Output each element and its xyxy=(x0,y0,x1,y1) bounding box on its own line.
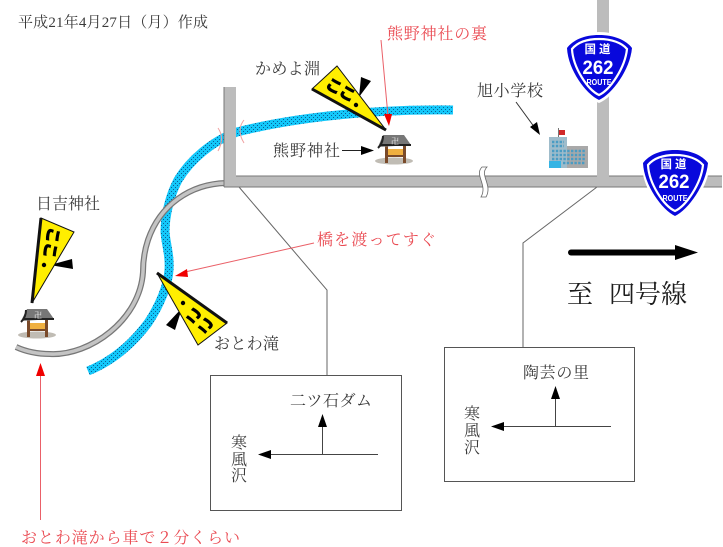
label: 寒風沢: 寒 xyxy=(464,404,480,423)
label: 橋を渡ってすぐ: 橋を渡ってすぐ xyxy=(317,231,436,249)
label: 寒風沢: 寒 xyxy=(231,433,247,452)
label: travel time: おとわ滝から車で２分くらい xyxy=(21,528,240,547)
arrow: left xyxy=(258,450,378,459)
arrow: to school xyxy=(516,102,540,135)
shield: route 262 east: 262 xyxy=(658,172,690,193)
label: 至 四号線: 四号線 xyxy=(609,280,687,309)
panel: left junction box xyxy=(210,376,402,510)
road break mark xyxy=(479,167,488,197)
label: 寒風沢: 沢 xyxy=(464,439,480,457)
arrow: to bridge xyxy=(175,243,314,277)
big arrow: to route 4 xyxy=(571,245,698,260)
label: 熊野神社: 熊野神社 xyxy=(273,142,340,160)
icon: school xyxy=(549,128,588,168)
label: 旭小学校: 旭小学校 xyxy=(477,82,544,100)
shield: route 262 north xyxy=(566,32,634,103)
label: 寒風沢: 沢 xyxy=(231,467,247,485)
label: 陶芸の里: 陶芸の里 xyxy=(523,364,589,382)
bridge marks xyxy=(218,120,244,151)
road: curved road to Hiyoshi shrine xyxy=(16,183,226,354)
arrow: from Otowa falls xyxy=(36,363,45,520)
label: かめよ淵: かめよ淵 xyxy=(255,60,320,78)
shield: route 262 east: ROUTE xyxy=(662,194,688,203)
shield: route 262 north: ROUTE xyxy=(586,78,612,87)
label: 日吉神社: 日吉神社 xyxy=(36,195,100,213)
connector line to left box xyxy=(239,187,327,376)
date text: 平成21年4月27日（月）作成 xyxy=(18,13,208,31)
flag: おとわ滝: ここ xyxy=(183,304,218,337)
label: 寒風沢: 風 xyxy=(231,451,247,469)
flag: おとわ滝 xyxy=(157,273,227,345)
flag: 日吉神社: ここ xyxy=(40,226,62,260)
label: 熊野神社の裏: 熊野神社の裏 xyxy=(387,25,487,43)
connector line to right box xyxy=(523,187,597,347)
arrow: left xyxy=(491,422,611,431)
arrow: up xyxy=(318,414,327,455)
arrow: up xyxy=(551,386,560,427)
shield: route 262 east xyxy=(642,148,710,219)
arrow: to Kumano shrine xyxy=(342,146,374,155)
label: 二ツ石ダム: 二ツ石ダム xyxy=(290,392,372,410)
flag: かめよ淵 xyxy=(312,66,386,130)
label: 寒風沢: 風 xyxy=(464,422,480,440)
icon: Kumano shrine: 卍 xyxy=(391,137,399,146)
shield: route 262 east: 国道 xyxy=(660,157,690,171)
icon: Kumano shrine xyxy=(375,135,413,164)
shield: route 262 north: 262 xyxy=(582,58,614,79)
label: 至 四号線: 至 xyxy=(567,280,593,309)
shield: route 262 north: 国道 xyxy=(584,42,614,56)
label: おとわ滝: おとわ滝 xyxy=(214,334,279,353)
road network xyxy=(224,0,722,187)
icon: Hiyoshi shrine: 卍 xyxy=(34,311,42,320)
river xyxy=(88,110,453,371)
icon: Hiyoshi shrine xyxy=(18,309,56,338)
flag: 日吉神社 xyxy=(32,218,74,303)
arrow: to behind of Kumano shrine xyxy=(381,40,392,126)
panel: right junction box xyxy=(444,348,634,482)
flag: かめよ淵: ここ xyxy=(323,76,358,106)
